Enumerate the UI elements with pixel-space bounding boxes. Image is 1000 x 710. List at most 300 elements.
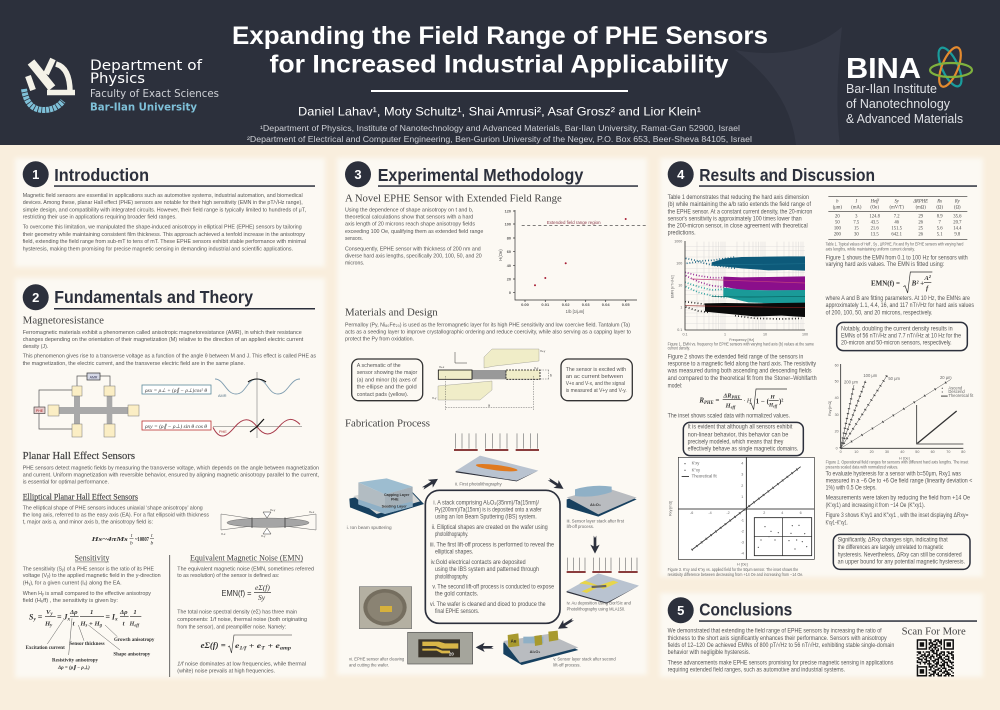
chart: AMR and PHE curves: AMR: [218, 394, 227, 398]
callout: process steps: final EPHE sensors.: [435, 608, 480, 615]
diagram: sensor schematic: V-x: [534, 366, 539, 370]
text block: noise dominance: (white) noise prevails at high frequencies.: [177, 668, 275, 674]
diagram: ellipse sensor: V+y: [270, 508, 276, 512]
equation: EMN fit: B² +: [911, 280, 924, 288]
text block: table demonstration: predictions.: [668, 230, 696, 237]
table: sensor parameters: [828, 197, 967, 239]
equation: total noise: eΣ(f) =: [201, 641, 226, 650]
equation: sensitivity with annotations: H: [45, 620, 50, 627]
chart: anisotropy field versus 1/b: 40: [507, 264, 511, 268]
chart: operational field ranges: 40: [900, 450, 904, 454]
title: Expanding the Field Range of PHE Sensors: [232, 22, 768, 50]
table: sensor parameters: 20: [835, 214, 840, 219]
chart: EMN versus frequency: 0.1: [682, 332, 688, 336]
chart: operational field ranges: Ascend: [948, 385, 963, 390]
text block: figure 1 description: Figure 1 shows the EMN from 0.1 to 100 Hz for sensors with: [826, 254, 968, 261]
table: sensor parameters: 3: [855, 214, 858, 219]
callout: process steps: ii. Elliptical shapes are created on the wafer using: [432, 524, 548, 531]
chart: hysteresis resistivity: K′xy: [692, 461, 700, 466]
callout: doubling current density: [837, 322, 967, 351]
equation: sensitivity with annotations: + H: [87, 620, 100, 627]
equation: sensitivity with annotations: s: [85, 623, 88, 628]
equation: total noise: + e: [246, 641, 262, 650]
callout: single magnetic domains: effectively behave as single magnetic domains.: [688, 446, 799, 453]
text block: magnetoresistance: the magnetization, the electric current, and the transverse electric field are in the same plane.: [23, 361, 245, 367]
equation: sensitivity with annotations: 1: [90, 609, 93, 616]
chart: EMN versus frequency: 1: [680, 306, 682, 310]
chart: operational field ranges: Rxy [mΩ]: [828, 401, 832, 416]
callout: single magnetic domains: [683, 422, 803, 456]
text block: conclusions: These advancements make EPHE sensors promising for precise magnetic sensing in applications: [668, 659, 893, 666]
chart: operational field ranges: 20: [870, 450, 874, 454]
callout: process steps: vi. The wafer is cleaned and diced to produce the: [430, 601, 546, 608]
text block: novel sensor: Consequently, EPHE sensor with thickness of 200 nm and: [345, 246, 481, 252]
chart: anisotropy field versus 1/b: 0.04: [602, 302, 610, 307]
step v: after second lift-off: [503, 631, 616, 667]
table: sensor parameters: 14.4: [953, 227, 962, 232]
table: sensor parameters: (Ω): [936, 205, 943, 210]
equation: anisotropy field: b: [150, 540, 154, 546]
affiliations: [247, 124, 752, 144]
table: sensor parameters: 29: [918, 214, 924, 219]
equation: total noise: T: [261, 646, 266, 652]
text block: introduction: field, extending the field range from sub-mT to tens of mT. These EPHE sensors exhibit stable performance with minimal: [23, 239, 306, 245]
chart: operational field ranges: 30: [835, 413, 839, 417]
caption: figure 2: [826, 460, 969, 469]
chart: operational field ranges: 70: [946, 450, 950, 454]
step v: after second lift-off: Al₂O₃: [530, 649, 541, 654]
equation: EMN: EMN(f) =: [222, 589, 252, 598]
logo: BINA institute: [846, 45, 972, 126]
chart: anisotropy field versus 1/b: 20: [507, 278, 511, 282]
chart: hysteresis resistivity: Rxy [mΩ]: [669, 501, 673, 516]
text block: conclusions: behavior with negligible hysteresis.: [668, 649, 750, 656]
text block: materials: [345, 322, 632, 343]
step vi: photo of finished sensor: [349, 632, 473, 667]
equation: PHE resistance: R: [699, 397, 704, 405]
chart: AMR and PHE curves: [213, 372, 302, 438]
heading: planar hall effect sensors: Planar Hall Effect Sensors: [23, 451, 135, 462]
chart: operational field ranges: Theoretical fit: [948, 393, 974, 398]
diagram: ellipse sensor: [221, 508, 316, 538]
chart: operational field ranges: 10: [854, 450, 858, 454]
callout: sensor schematic: the ellipse and the gold: [357, 385, 417, 391]
text block: inset note: The inset shows scaled data with normalized values.: [668, 412, 790, 419]
step i: ion beam sputtering: Capping Layer: [384, 493, 410, 497]
chart: EMN versus frequency: [670, 240, 808, 342]
table: sensor parameters: (Ω): [954, 205, 961, 210]
chart: operational field ranges: 80: [961, 450, 965, 454]
text block: figure 2 description: response to a magnetic field along the hard axis. The resistivity: [668, 361, 817, 368]
chart: AMR and PHE curves: PHE: [219, 430, 227, 434]
panel: experimental methodology: [337, 158, 647, 675]
callout: doubling current density: Notably, doubling the current density results in: [841, 325, 953, 332]
chart: hysteresis resistivity: 6: [800, 511, 802, 515]
equation: EMN: [222, 583, 271, 602]
text block: table demonstration: (b) while maintaining the a/b ratio extends the field range of: [668, 201, 811, 208]
equation: sensitivity with annotations: Resistivity anisotropy: [52, 659, 99, 664]
text block: conclusions: requiring extended field ranges, such as automotive and industrial systems.: [668, 667, 845, 674]
equation: sensitivity with annotations: Shape anisotropy: [113, 653, 151, 658]
chart: hysteresis resistivity: -4: [741, 552, 744, 556]
callout: process steps: photolithography.: [435, 531, 468, 538]
equation: anisotropy field: ~10807: [135, 536, 149, 543]
text block: sensitivity: field (Hₑff) , the sensitivity is given by:: [23, 598, 118, 604]
step v: after second lift-off: lift-off process.: [553, 662, 581, 667]
text block: figure 1 description: varying hard axis values. The EMN is fitted using:: [826, 261, 945, 268]
table: sensor parameters: Heff: [870, 199, 879, 204]
text block: introduction: To overcome this limitation, we manipulated the shape-induced anisotropy in elliptical PHE (EPHE) sensors by tailoring: [23, 225, 302, 231]
text block: planar hall effect: is essential for optimal performance.: [23, 480, 109, 486]
diagram: ellipse sensor: V-x: [221, 532, 226, 536]
text block: table demonstration: the 200-micron sensor, in close agreement with theoretical: [668, 223, 808, 230]
table: sensor parameters: 46: [894, 220, 900, 225]
heading: scan for more: Scan For More: [902, 626, 966, 637]
step v: after second lift-off: Au: [511, 638, 517, 643]
chart: hysteresis resistivity: Theoretical fit: [692, 473, 717, 478]
equation: sensitivity with annotations: =: [36, 612, 43, 621]
text block: sensitivity: When Hᵧ is small compared to the effective anisotropy: [23, 591, 151, 597]
equation: EMN fit: EMN(f) =: [871, 280, 900, 288]
callout: process steps: v. The second lift-off process is conducted to expose: [432, 583, 554, 590]
diagram: sensor schematic: V+y: [540, 349, 546, 353]
text block: figure 1 description: [826, 254, 968, 268]
text block: hysteresis: Measurements were taken by reducing the field from +14 Oe: [826, 495, 970, 502]
chart: EMN versus frequency: Frequency [Hz]: [729, 338, 754, 342]
callout: sensor schematic: contact pads (yellow).: [357, 392, 409, 398]
chart: hysteresis resistivity: 1: [741, 495, 743, 499]
callout: process steps: using an Ion Beam Sputtering (IBS) system.: [435, 513, 537, 520]
heading: experimental methodology: Experimental Methodology: [378, 165, 584, 185]
chart: EMN versus frequency: 100: [676, 262, 682, 266]
text block: planar hall effect: PHE sensors detect magnetic fields by measuring the transverse voltage, which depends on the angle between magnetization: [23, 465, 319, 471]
title: [232, 22, 768, 78]
callout: doubling current density: 20-micron and 50-micron sensors, respectively.: [841, 339, 952, 346]
panel: introduction: [15, 158, 325, 267]
table: sensor parameters: 35.6: [953, 214, 962, 219]
table: sensor parameters: 30: [854, 233, 859, 238]
text block: fitting parameters: approximately 1.1, 4.4, 16, and 117 nT/√Hz for hard axis values: [826, 302, 974, 309]
chart: operational field ranges: 20 μm: [940, 375, 952, 380]
equation: sensitivity with annotations: Growth anisotropy: [114, 638, 155, 643]
chart: anisotropy field versus 1/b: [498, 210, 647, 314]
heading: introduction: [23, 161, 315, 187]
text block: table demonstration: sensor's sensitivity is approximately 100 times lower than: [668, 215, 802, 222]
heading: introduction: Introduction: [54, 165, 149, 185]
noise band: 200 micron: [705, 303, 805, 317]
text block: EMN definition: The equivalent magnetic noise (EMN, sometimes referred: [177, 566, 314, 572]
table: sensor parameters: 7.5: [853, 220, 860, 225]
table: sensor parameters: 50: [835, 220, 840, 225]
equation: sensitivity with annotations: H: [130, 621, 134, 627]
chart: anisotropy field versus 1/b: 1/b [1/μm]: [566, 309, 584, 314]
table: sensor parameters: (mA): [851, 205, 862, 210]
callout: doubling current density: EMNs of 56 nT/√Hz and 7.7 nT/√Hz at 10 Hz for the: [841, 332, 961, 339]
table: sensor parameters: (Oe): [870, 205, 879, 210]
text block: figure 2 description: was measured during both ascending and descending fields: [667, 368, 812, 375]
heading: results and discussion: 4: [677, 167, 685, 182]
chart: hysteresis resistivity: 2: [741, 484, 743, 488]
text block: fitting parameters: where A and B are fitting parameters. At 10 Hz, the EMNs are: [825, 295, 970, 302]
text block: noise components: [177, 610, 307, 630]
table: sensor parameters: 8.9: [937, 214, 943, 219]
text block: novel sensor: Using the dependence of shape anisotropy on t and b,: [345, 208, 474, 214]
diagram: sensor schematic: a: [488, 404, 490, 408]
heading: experimental methodology: 3: [354, 167, 362, 182]
text block: sensitivity: [23, 566, 161, 604]
logo: Bar-Ilan Department of Physics: Bar-Ilan University: [90, 102, 197, 114]
step ii: first photolithography: [454, 433, 539, 487]
callout: hysteresis upper bound: [833, 534, 970, 569]
equation: EMN fit: A²: [923, 275, 932, 282]
text block: novel sensor: theoretical calculations show that sensors with a hard: [345, 215, 473, 221]
equation: PHE resistance: 1 − (: [756, 397, 770, 405]
equation: sensitivity with annotations: S: [29, 612, 33, 621]
logo: BINA institute: Bar-Ilan Institute: [846, 82, 937, 96]
callout: hysteresis upper bound: the differences are largely unrelated to magnetic: [838, 544, 943, 551]
logo: BINA institute: BINA: [846, 53, 921, 85]
equation: sensitivity with annotations: x: [67, 617, 71, 623]
heading: introduction: 1: [32, 167, 39, 182]
text block: materials: Permalloy (Py, Ni₈₀Fe₂₀) is used as the ferromagnetic layer for its high PHE sensitivity and low coercive field. Tantalum (Ta): [345, 322, 630, 328]
header banner: [0, 0, 1000, 145]
chart: anisotropy field versus 1/b: 100: [505, 222, 511, 226]
chart: anisotropy field versus 1/b: 120: [505, 210, 511, 214]
equation: PHE resistance: eff: [773, 404, 778, 408]
step iii: after first lift-off: iii. Sensor layer stack after first: [567, 518, 625, 523]
callout: sensor schematic: sensor showing the major: [357, 370, 417, 376]
text block: sensitivity: (Hᵧ), for a given current (Iₓ) along the EA.: [23, 580, 122, 586]
step iv: Au deposition: iv. Au deposition using Bor/Sic and: [567, 601, 632, 606]
callout: sensor schematic: [352, 359, 423, 401]
equation: sensitivity with annotations: eff: [134, 622, 140, 627]
text block: table demonstration: [668, 194, 813, 237]
step ii: first photolithography: ii. First photolithography: [455, 482, 503, 487]
text block: figure 2 description: Figure 2 shows the extended field range of the sensors in: [668, 353, 804, 360]
equation: sensitivity with annotations: = J: [57, 612, 68, 621]
text block: planar hall effect: [23, 465, 319, 486]
chart: operational field ranges: 30: [885, 450, 889, 454]
table: sensor parameters: 7.2: [894, 214, 900, 219]
text block: table demonstration: Table 1 demonstrates that reducing the hard axis dimension: [668, 194, 809, 201]
callout: process steps: i. A stack comprising Al₂O₃(35nm)/Ta(15nm)/: [433, 500, 539, 507]
equation: anisotropy field: t: [151, 533, 153, 539]
chart: operational field ranges: 200 μm: [844, 379, 858, 384]
table: sensor parameters: 200: [834, 233, 841, 238]
text block: hysteresis: [826, 470, 973, 527]
text block: noise components: The total noise spectral density (eΣ) has three main: [177, 610, 297, 616]
chart: operational field ranges: Descend: [948, 389, 965, 394]
table: sensor parameters: 5.6: [937, 227, 943, 232]
chart: anisotropy field versus 1/b: 80: [507, 236, 511, 240]
text block: novel sensor: diverse hard axis lengths, specifically 200, 100, 50, and 20: [345, 253, 482, 259]
table: sensor parameters: 43.5: [871, 220, 879, 225]
equation: PHE resistance: =: [714, 397, 719, 405]
noise band: 20 micron: [712, 256, 805, 271]
text block: introduction: hysteresis, making them promising for precise magnetic sensing in demanding industrial and scientific applications.: [23, 246, 293, 252]
equation: total noise: amp: [280, 646, 292, 652]
text block: table demonstration: the EPHE sensor. At a constant current density, the 20-micron: [668, 208, 813, 215]
chart: anisotropy field versus 1/b: 0.02: [562, 302, 570, 307]
table: sensor parameters: 100: [834, 227, 841, 232]
equation: anisotropy field: t: [131, 533, 133, 539]
equation: PHE resistance: eff: [731, 404, 736, 409]
equation: sensitivity with annotations: Excitation current: [26, 646, 65, 651]
text block: introduction: [23, 193, 306, 252]
chart: operational field ranges: 50: [835, 379, 839, 383]
text block: sensitivity: The sensitivity (Sᵧ) of a PHE sensor is the ratio of its PHE: [23, 566, 154, 572]
chart: EMN versus frequency: 1: [724, 332, 726, 336]
table: sensor parameters: 21.6: [871, 227, 879, 232]
heading: conclusions: [668, 597, 977, 623]
table: sensor parameters: Ry: [954, 199, 961, 204]
diagram: sensor schematic: V+x: [439, 365, 445, 369]
table: sensor parameters: 642.1: [891, 233, 903, 238]
heading: results and discussion: Results and Discussion: [699, 165, 875, 185]
chart: operational field ranges: 100 μm: [863, 373, 878, 378]
step iii: after first lift-off: lift-off process.: [567, 524, 594, 529]
text block: hysteresis: measured in a −6 Oe to +6 Oe field range (linearity deviation <: [826, 477, 973, 484]
chart: hysteresis resistivity: K″xy: [692, 467, 701, 472]
text block: introduction: simple design, and compatibility with integrated circuits. However, their field range is typically limited to hundreds of μT,: [23, 207, 306, 213]
equation: EMN: eΣ(f): [255, 583, 270, 592]
arrow: iii to iv: [590, 536, 600, 554]
chart: hysteresis resistivity: -6: [690, 511, 693, 515]
arrow: iv to v: [556, 615, 576, 633]
diagram: sensor schematic: [432, 349, 552, 410]
affiliations: ¹Department of Physics, Institute of Nanotechnology and Advanced Materials, Bar-Ilan University, Ramat-Gan 52900, Israel: [260, 124, 740, 133]
chart: operational field ranges: 40: [835, 396, 839, 400]
text block: conclusions: thickness to the short axis significantly enhances their performance. Sensors with anisotropy: [668, 635, 887, 642]
text block: hysteresis: To evaluate hysteresis for a sensor with b=50μm, Rxy1 was: [826, 470, 961, 477]
lower results content: [667, 353, 974, 577]
chart: hysteresis resistivity: H [Oe]: [737, 563, 748, 567]
caption: table 1: [826, 242, 964, 252]
heading: fundamentals and theory: 2: [32, 290, 39, 305]
callout: process steps: iv.Gold electrical contacts are deposited: [431, 559, 526, 566]
chart: operational field ranges: H [Oe]: [899, 456, 910, 460]
callout: process steps: elliptical shapes.: [435, 548, 474, 555]
diagram: hall bar device: PHE: [36, 409, 44, 413]
heading: equivalent magnetic noise: Equivalent Magnetic Noise (EMN): [190, 554, 303, 563]
logo: BINA institute: of Nanotechnology: [846, 97, 951, 111]
text block: elliptical shape anisotropy: [23, 505, 209, 526]
heading: magnetoresistance: Magnetoresistance: [23, 315, 104, 326]
panel: results and discussion: [660, 158, 983, 577]
callout: sensor schematic: (a) and minor (b) axes of: [357, 377, 417, 383]
caption: table 1: axis lengths, while maintaining uniform current density.: [826, 247, 915, 252]
chart: operational field ranges: 20: [835, 430, 839, 434]
heading: conclusions: Conclusions: [699, 600, 793, 620]
affiliations: ²Department of Electrical and Computer Engineering, Ben-Gurion University of the Negev, P.O. Box 653, Beer-Sheva 84105, Israel: [247, 135, 752, 144]
step iv: Au deposition: [567, 558, 639, 611]
equation: AMR resistivity: [142, 385, 211, 394]
text block: novel sensor: axis length of 20 microns reach shape anisotropy fields: [345, 222, 475, 228]
heading: materials and design: Materials and Design: [345, 307, 438, 319]
text block: noise components: from the sensor), and preamplifier noise. Namely:: [177, 624, 286, 630]
equation: sensitivity with annotations: t: [73, 620, 76, 627]
equation: EMN: Sy: [258, 593, 266, 602]
table: sensor parameters: (mΩ): [916, 205, 926, 210]
caption: figure 3: Figure 3. K′xy and K″xy vs. applied field for the 50μm sensor. The inset shows the: [668, 567, 799, 572]
table: sensor parameters: 26: [918, 233, 924, 238]
text block: hysteresis: (K′xy1) and increasing it from −14 Oe (K″xy1).: [826, 502, 925, 509]
logo: Bar-Ilan Department of Physics: [24, 58, 219, 114]
equation: sensitivity with annotations: g: [99, 623, 103, 628]
chart: hysteresis resistivity: 4: [741, 462, 743, 466]
equation: PHE resistance: PHE: [732, 394, 741, 399]
step iv: Au deposition: Photolithography using MLA150.: [567, 606, 625, 611]
equation: PHE resistance: H: [769, 403, 773, 409]
callout: excitation: V+x and V-x, and the signal: [566, 381, 625, 387]
logo: Bar-Ilan Department of Physics: Faculty of Exact Sciences: [90, 88, 219, 100]
caption: figure 3: [668, 567, 803, 577]
heading: fundamentals and theory: [23, 284, 315, 310]
heading: fundamentals and theory: Fundamentals and Theory: [54, 287, 253, 307]
text block: fitting parameters: of 200, 100, 50, and 20 microns, respectively.: [826, 309, 933, 316]
equation: PHE resistance: )²: [779, 397, 783, 405]
equation: sensitivity with annotations: 1: [133, 609, 137, 616]
diagram: sensor schematic: b: [550, 374, 552, 378]
authors: Daniel Lahav¹, Moty Schultz¹, Shai Amrusi², Asaf Grosz² and Lior Klein¹: [298, 104, 701, 118]
chart: anisotropy field versus 1/b: 0.03: [582, 302, 590, 307]
callout: excitation: an ac current between: [566, 374, 623, 380]
equation: total noise: e: [235, 641, 238, 650]
equation: PHE resistivity: [142, 421, 211, 430]
text block: magnetoresistance: changes depending on the orientation of their magnetization (M) relative to the direction of an applied electric current: [23, 337, 304, 343]
chart: hysteresis resistivity: -2: [741, 529, 744, 533]
chart: anisotropy field versus 1/b: 0.05: [622, 302, 630, 307]
chart: anisotropy field versus 1/b: 0.00: [521, 302, 530, 307]
text block: novel sensor: sensors.: [345, 236, 363, 242]
text block: fitting parameters: [825, 295, 974, 316]
callout: excitation: [561, 359, 632, 401]
step iii: after first lift-off: Al₂O₃: [590, 502, 601, 507]
diagram: sensor schematic: V-y: [432, 396, 437, 400]
heading: experimental methodology: [345, 161, 638, 187]
equation: PHE resistivity: ρxy = (ρ∥ − ρ⊥) sin θ cos θ: [144, 423, 207, 430]
table: sensor parameters: Rx: [936, 199, 943, 204]
text block: materials: acts as a seeding layer to improve crystallographic ordering and reduce coercivity, while also serving as a capping layer to: [345, 330, 632, 336]
text block: EMN definition: to as resolution) of the sensor is defined as:: [177, 573, 280, 579]
arrow: i to ii: [420, 475, 440, 492]
text block: elliptical shape anisotropy: t, major axis a, and minor axis b, the anisotropy field is:: [23, 520, 153, 526]
equation: sensitivity with annotations: y: [49, 623, 53, 628]
text block: figure 2 description: [667, 353, 817, 389]
diagram: ellipse sensor: V+x: [309, 510, 315, 514]
table: sensor parameters: 7: [938, 220, 941, 225]
text block: magnetoresistance: This phenomenon gives rise to a transverse voltage as a function of the angle θ between M and J. This effect is called PHE as: [23, 354, 316, 360]
equation: sensitivity with annotations: H: [80, 620, 86, 627]
step i: ion beam sputtering: [347, 478, 424, 530]
panel: fundamentals and theory: [15, 278, 325, 678]
equation: sensitivity with annotations: = I: [105, 612, 115, 621]
callout: hysteresis upper bound: Significantly, ΔRxy changes sign, indicating that: [838, 537, 948, 544]
text block: magnetoresistance: [23, 330, 316, 367]
equation: PHE resistance: PHE: [704, 401, 714, 406]
table: sensor parameters: 20.7: [953, 220, 962, 225]
text block: materials: protect the Py from oxidation.: [345, 337, 414, 343]
icon: atom: [930, 45, 972, 89]
step vi: photo of chip on coin: [359, 587, 412, 629]
chart: anisotropy field versus 1/b: H(Oe): [498, 249, 503, 261]
text block: noise dominance: 1/f noise dominates at low frequencies, while thermal: [177, 661, 306, 667]
callout: excitation: The sensor is excited with: [566, 367, 626, 373]
caption: figure 2: presents scaled data with normalized values.: [826, 464, 898, 469]
text block: noise dominance: [177, 661, 306, 674]
diagram: fabrication process flow: [347, 433, 639, 667]
text block: novel sensor: microns.: [345, 261, 365, 267]
